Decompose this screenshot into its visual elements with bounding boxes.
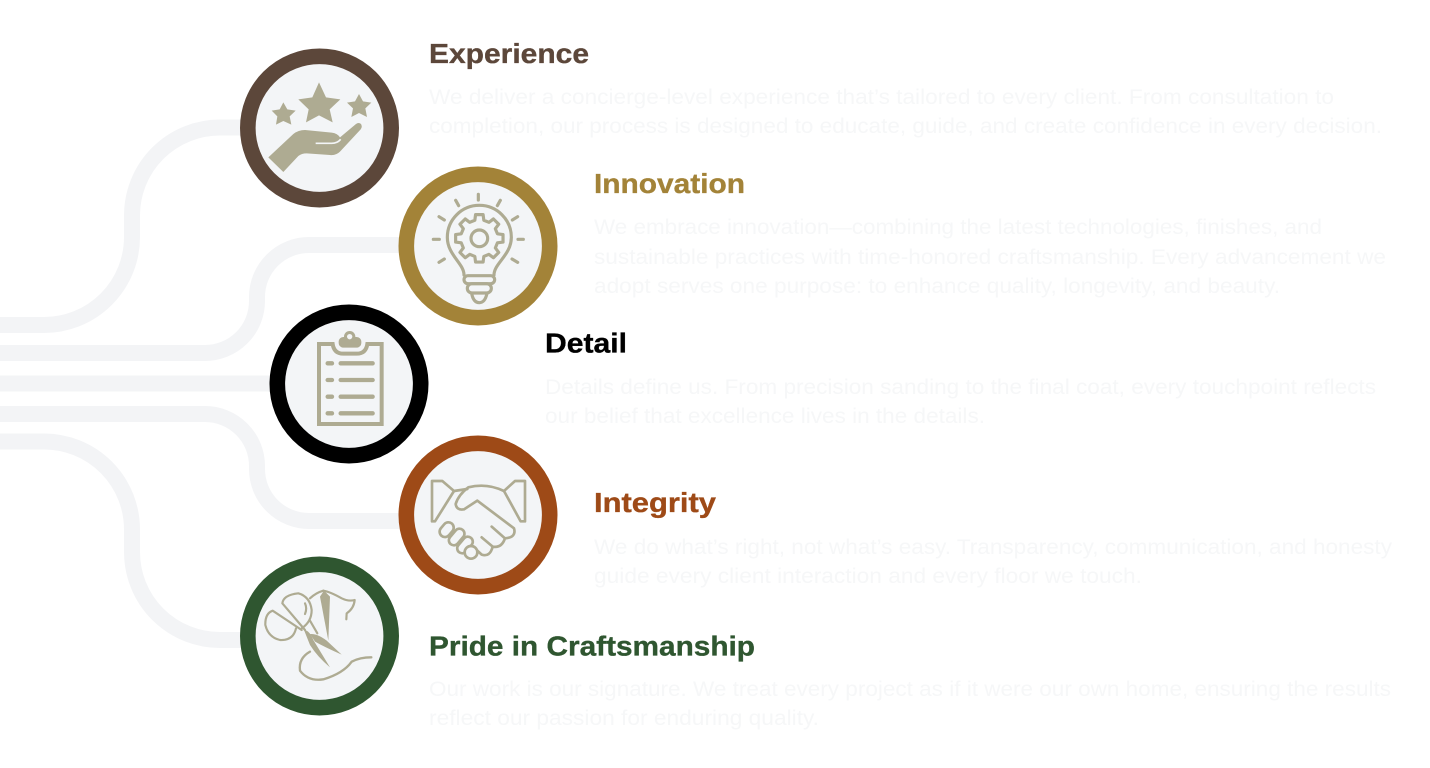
heading: experience: Experience <box>429 38 589 69</box>
text: integrity description: We do what’s right, not what’s easy. Transparency, communication, and honesty <box>594 536 1393 559</box>
text: experience description: We deliver a concierge-level experience that’s tailored to every client. From consultation to <box>429 86 1334 109</box>
item: experience <box>248 38 1382 200</box>
integrity badge <box>406 443 550 587</box>
detail badge <box>277 312 421 456</box>
text: experience description <box>429 86 1382 138</box>
text: integrity description: guide every client interaction and every floor we touch. <box>594 565 1142 588</box>
text: pride description: Our work is our signature. We treat every project as if it were our own home, ensuring the results <box>429 678 1391 701</box>
icon: clipboard checklist <box>319 331 382 424</box>
item: detail <box>277 312 1376 456</box>
text: detail description: Details define us. From precision sanding to the final coat, every touchpoint reflects <box>545 376 1376 399</box>
pride badge <box>248 564 391 708</box>
text: pride description: reflect our passion for enduring quality. <box>429 707 819 730</box>
item: integrity <box>406 443 1393 588</box>
text: detail description <box>545 376 1376 428</box>
icon: stars over open hand <box>268 82 371 172</box>
icon: light bulb with gear <box>433 194 523 303</box>
heading: integrity: Integrity <box>594 487 716 518</box>
text: experience description: completion, our process is designed to educate, guide, and create confidence in every decision. <box>429 115 1382 138</box>
experience badge <box>248 56 391 200</box>
item: innovation <box>406 168 1386 318</box>
innovation badge <box>406 174 550 318</box>
text: innovation description: We embrace innovation—combining the latest technologies, finishes, and <box>594 216 1322 239</box>
heading: pride in craftsmanship: Pride in Craftsmanship <box>429 630 755 662</box>
text: integrity description <box>594 536 1393 588</box>
heading: innovation: Innovation <box>594 168 745 199</box>
icon: scissors, needle and thread <box>265 591 371 680</box>
text: pride description <box>429 678 1391 730</box>
heading: detail: Detail <box>545 328 627 358</box>
icon: handshake <box>432 481 525 559</box>
item: pride in craftsmanship <box>248 564 1391 730</box>
text: detail description: our belief that excellence lives in the details. <box>545 405 985 428</box>
text: innovation description <box>594 216 1386 298</box>
text: innovation description: sustainable practices with time-honored craftsmanship. Every advancement we <box>594 246 1386 269</box>
text: innovation description: adopt serves one purpose: to enhance quality, longevity, and beauty. <box>594 275 1280 298</box>
connector lines <box>0 128 410 640</box>
